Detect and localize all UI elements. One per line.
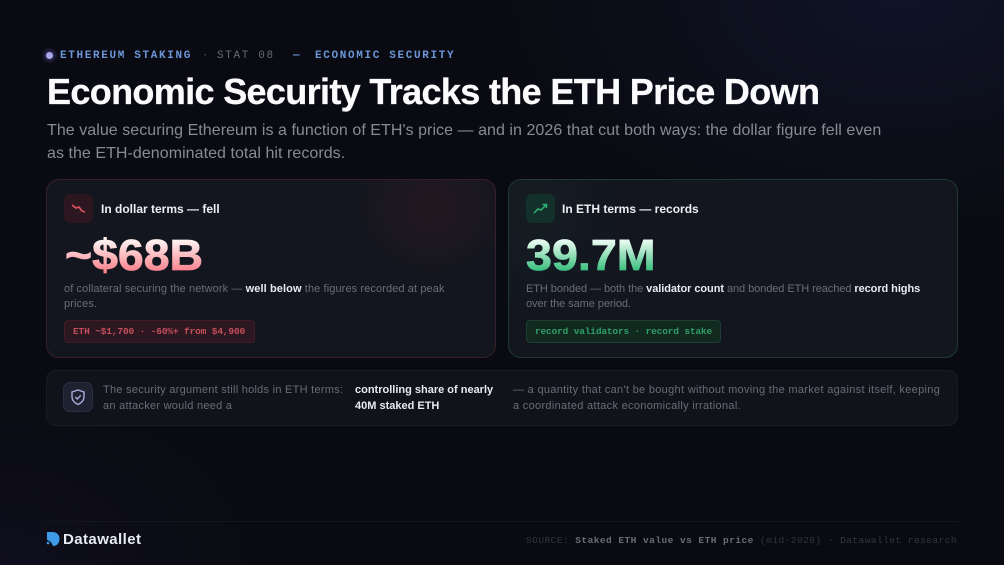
eyebrow label: ETHEREUM STAKING <box>60 50 192 62</box>
panel: security callout <box>46 370 958 426</box>
card heading: In dollar terms — fell <box>101 202 220 216</box>
tag: ETH ~$1,700 · -60%+ from $4,900 <box>73 326 245 337</box>
callout text: last column: a coordinated attack economically irrational. <box>513 400 741 412</box>
eyebrow label: · <box>202 50 210 62</box>
card description: of collateral securing the network — well below the figures recorded at peak <box>64 283 445 295</box>
callout text: bold column: controlling share of nearly <box>355 384 493 396</box>
title: Economic Security Tracks the ETH Price Down <box>47 71 819 112</box>
source line: SOURCE: Staked ETH value vs ETH price (mid-2026) · Datawallet research <box>526 535 957 546</box>
tag: record validators · record stake <box>535 326 712 337</box>
icon: shield <box>63 382 93 412</box>
subtitle: as the ETH-denominated total hit records. <box>47 144 345 162</box>
card heading: In ETH terms — records <box>562 202 699 216</box>
footer divider <box>46 521 958 522</box>
eyebrow label <box>42 48 455 64</box>
big number: ~$68B <box>65 231 203 280</box>
callout text: last column: — a quantity that can't be bought without moving the market against itself, keeping <box>513 384 940 396</box>
callout text: bold column: 40M staked ETH <box>355 400 439 412</box>
callout text: first column: The security argument still holds in ETH terms: <box>103 384 343 396</box>
logo: Datawallet: Datawallet <box>63 531 141 548</box>
card description: prices. <box>64 298 97 310</box>
callout text: last column <box>513 384 940 412</box>
callout text: bold column <box>355 384 493 412</box>
panel: in dollar terms <box>46 179 496 358</box>
card description <box>64 283 445 310</box>
tag <box>64 320 255 343</box>
subtitle: The value securing Ethereum is a function of ETH's price — and in 2026 that cut both ways: the dollar figure fell even <box>47 122 881 139</box>
subtitle <box>47 122 881 162</box>
card description: ETH bonded — both the validator count and bonded ETH reached record highs <box>526 283 920 295</box>
card description <box>526 283 920 310</box>
tag <box>526 320 721 343</box>
panel: in ETH terms <box>508 179 958 358</box>
card description: over the same period. <box>526 298 631 310</box>
icon: trending up <box>526 194 555 223</box>
eyebrow label: ECONOMIC SECURITY <box>315 50 455 62</box>
eyebrow label: — <box>293 50 301 62</box>
callout text: first column: an attacker would need a <box>103 400 232 412</box>
eyebrow label: STAT 08 <box>217 50 275 62</box>
callout text: first column <box>103 384 343 412</box>
icon: trending down <box>64 194 93 223</box>
big number: 39.7M <box>526 231 656 280</box>
